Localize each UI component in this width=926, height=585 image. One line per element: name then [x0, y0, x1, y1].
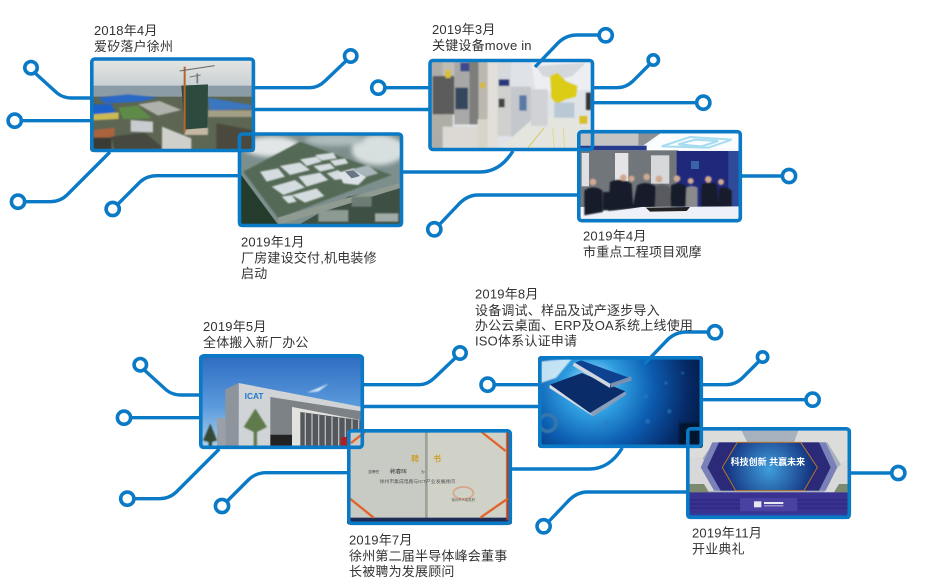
caption: April 2019: 市重点工程项目观摩 [583, 244, 702, 260]
panel: photo appointment certificate 2019-07: 为 [421, 469, 425, 474]
caption: April 2019: 2019年4月 [583, 228, 647, 244]
caption: August 2019: 2019年8月 [475, 286, 539, 302]
caption: April 2018: 爱矽落户徐州 [94, 39, 173, 54]
caption: July 2019: 徐州第二届半导体峰会董事 [349, 548, 507, 564]
caption: August 2019: 办公云桌面、ERP及OA系统上线使用 [475, 318, 693, 333]
caption: May 2019 [203, 319, 309, 350]
caption: April 2019 [583, 228, 702, 260]
caption: March 2019: 关键设备move in [432, 38, 532, 53]
caption: July 2019: 长被聘为发展顾问 [349, 564, 455, 579]
caption: July 2019 [349, 532, 507, 579]
circuit traces: lower group [129, 332, 892, 522]
panel: photo opening ceremony stage 2019-11 [686, 428, 851, 519]
panel: photo appointment certificate 2019-07: 韩春晖 [390, 467, 407, 475]
caption: January 2019: 2019年1月 [241, 234, 305, 250]
panel: photo clean room 2019-03 [430, 59, 594, 151]
caption: August 2019 [475, 286, 693, 348]
caption: March 2019: 2019年3月 [432, 22, 496, 37]
panel: photo opening ceremony stage 2019-11: 科技创新 共赢未来 [731, 456, 805, 467]
caption: May 2019: 全体搬入新厂办公 [203, 335, 309, 350]
caption: January 2019 [241, 234, 377, 281]
caption: November 2019 [692, 526, 762, 556]
panel: photo appointment certificate 2019-07: 聘 [411, 453, 419, 463]
caption: November 2019: 2019年11月 [692, 526, 762, 540]
panel: photo appointment certificate 2019-07: 书 [433, 453, 441, 463]
panel: photo semiconductor chips 2019-08 [538, 356, 703, 448]
panel: photo appointment certificate 2019-07: 徐州市集成电路与ICT产业发展顾问 [380, 478, 455, 485]
circuit nodes: upper group [8, 29, 796, 236]
panel: photo ICAT building 2019-05: ICAT [245, 391, 263, 401]
circuit nodes: lower group [117, 326, 905, 533]
caption: March 2019 [432, 22, 532, 53]
circuit traces: upper group [20, 35, 783, 225]
caption: January 2019: 启动 [241, 266, 267, 281]
panel: photo site aerial 2018-04 [88, 55, 258, 155]
panel: photo appointment certificate 2019-07 [345, 427, 515, 527]
caption: May 2019: 2019年5月 [203, 319, 267, 334]
caption: April 2018: 2018年4月 [94, 23, 158, 38]
caption: April 2018 [94, 23, 173, 54]
card frames [92, 59, 849, 523]
caption: August 2019: 设备调试、样品及试产逐步导入 [475, 303, 660, 318]
panel: photo appointment certificate 2019-07: 徐州市人民政府 [452, 497, 476, 502]
caption: November 2019: 开业典礼 [692, 542, 745, 556]
caption: August 2019: ISO体系认证申请 [475, 334, 577, 348]
panel: photo ICAT building 2019-05 [197, 352, 367, 452]
caption: July 2019: 2019年7月 [349, 532, 413, 548]
panel: photo officials visit 2019-04 [577, 130, 742, 222]
caption: January 2019: 厂房建设交付,机电装修 [241, 250, 377, 266]
panel: photo appointment certificate 2019-07: 兹聘任 [368, 469, 380, 474]
panel: photo campus rendering 2019-01 [235, 130, 405, 230]
